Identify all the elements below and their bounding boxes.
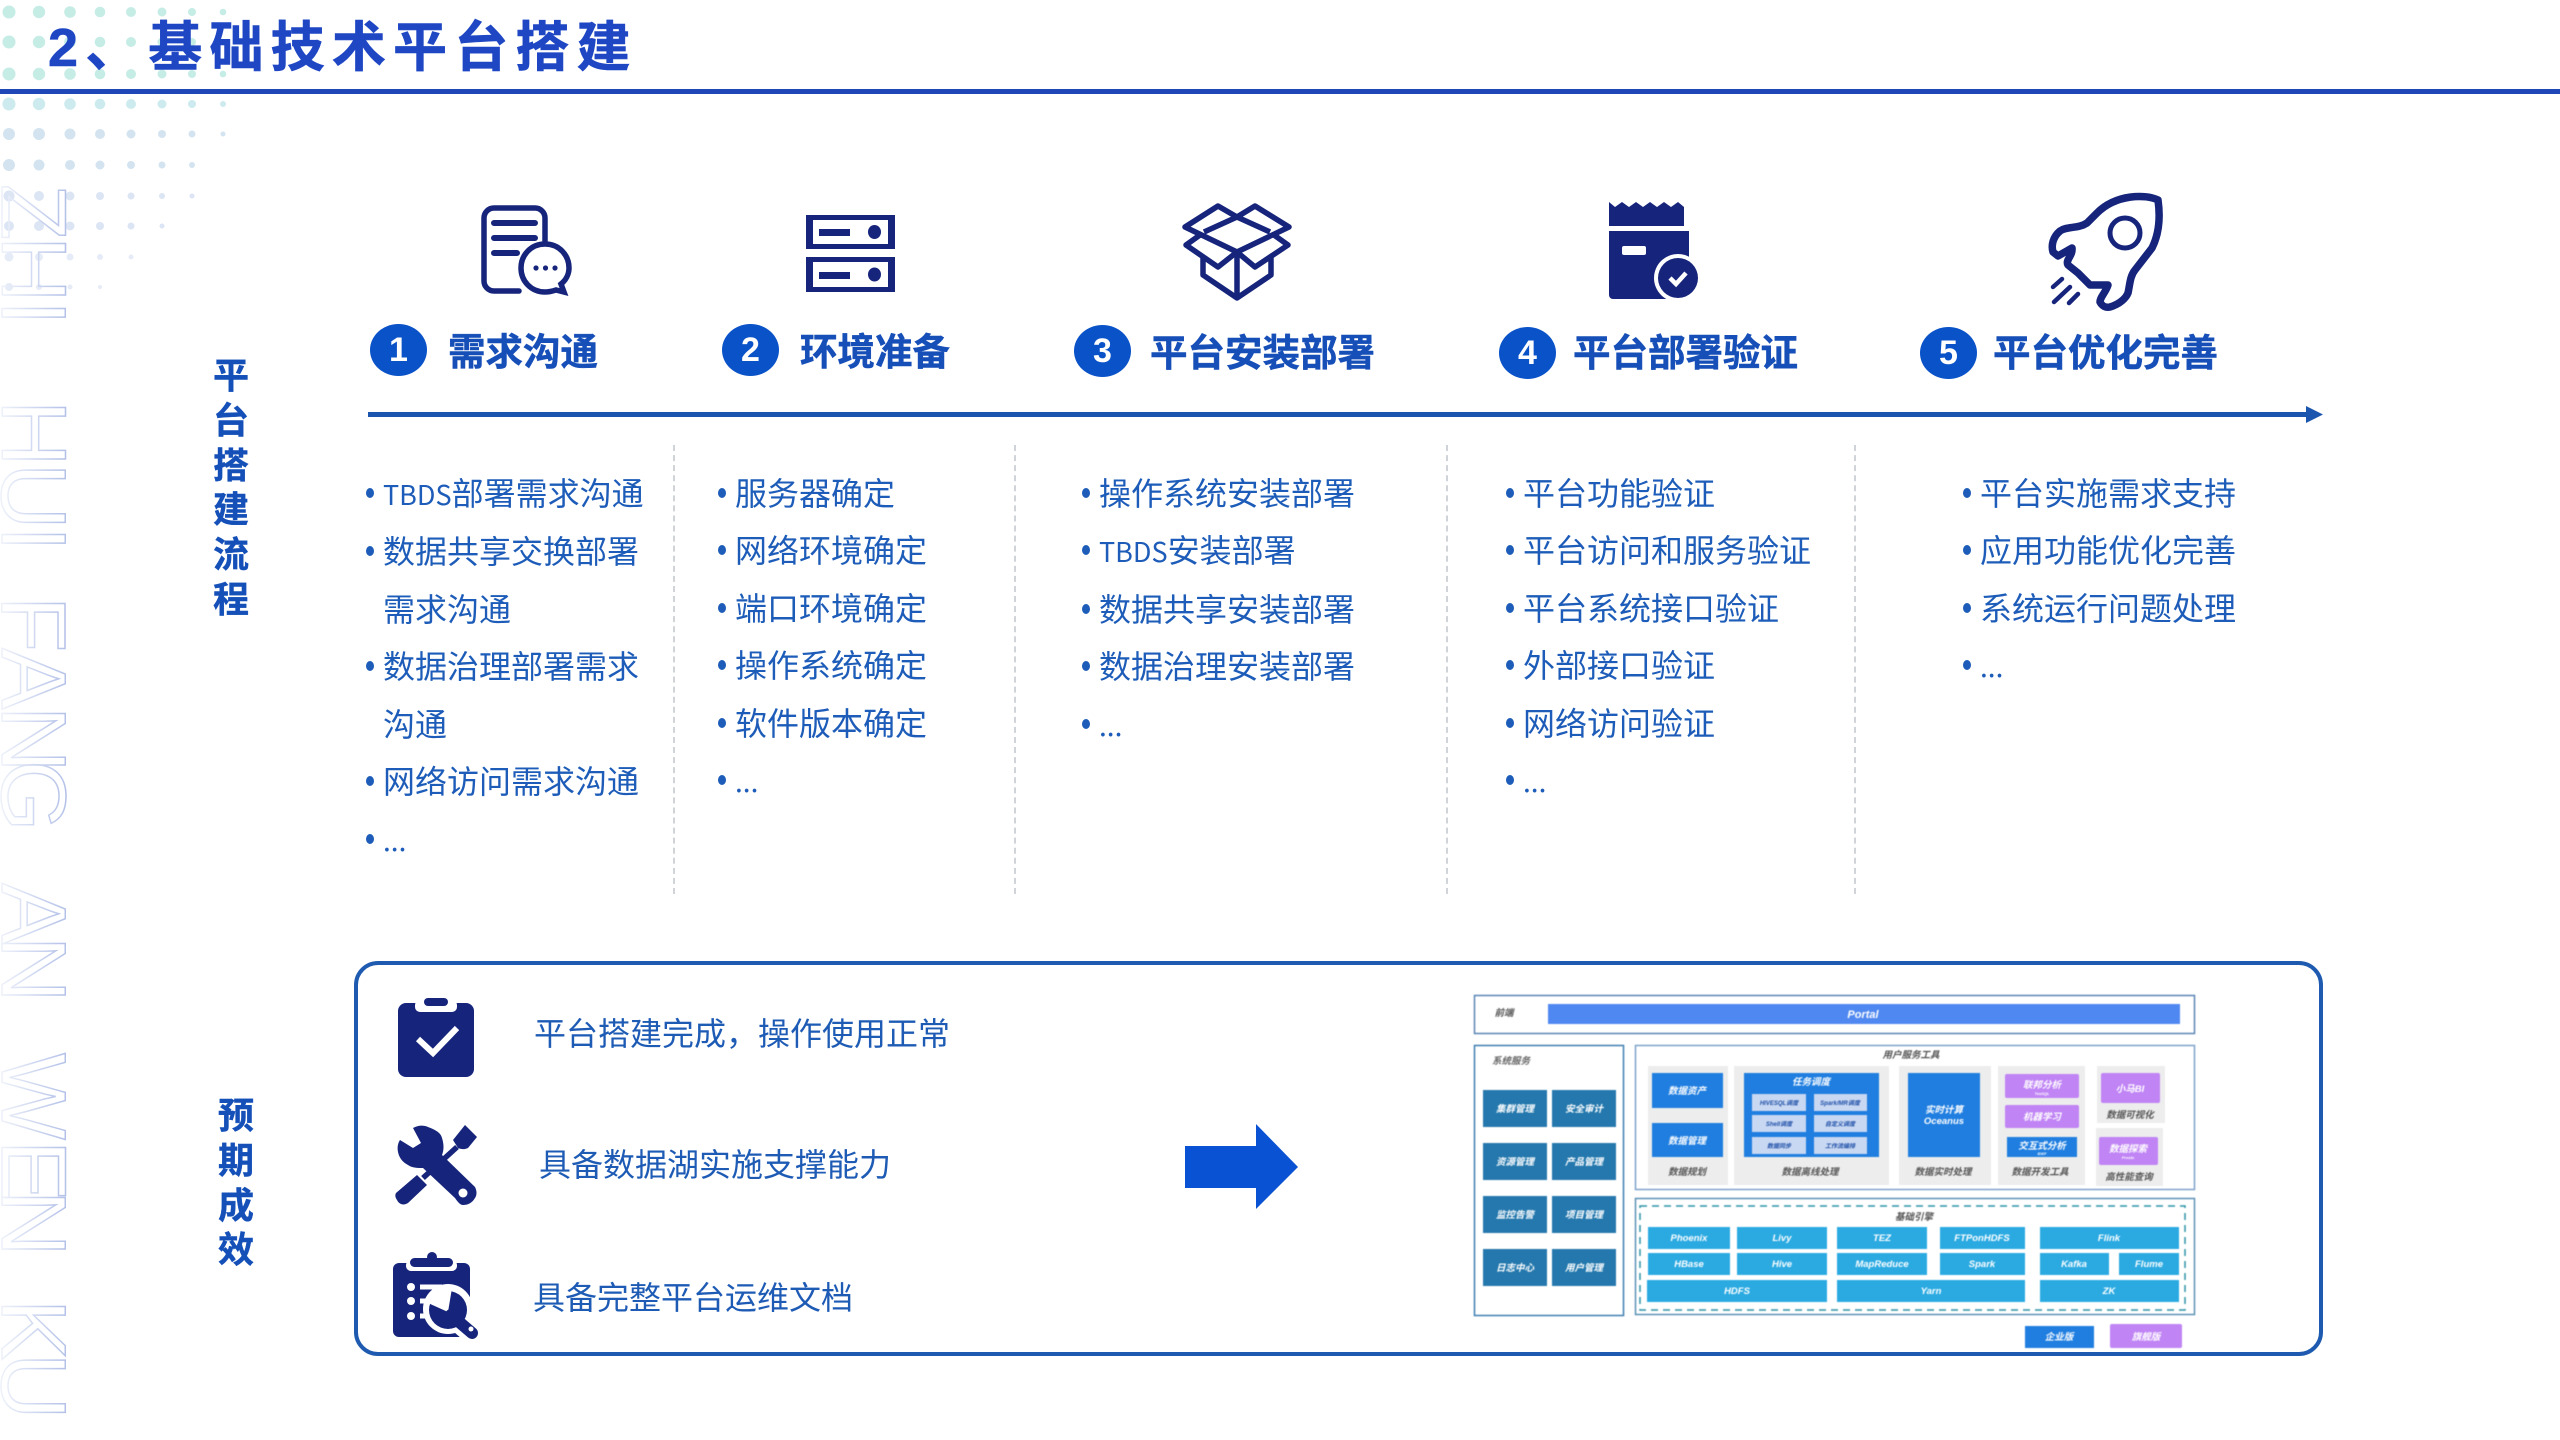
user service tools panel: 数据规划 xyxy=(1668,1166,1707,1178)
system services panel: 项目管理 xyxy=(1565,1209,1604,1221)
list: step 3 tasks xyxy=(1082,468,1355,744)
side label: expected results: 效 xyxy=(218,1229,254,1270)
list: step 5 tasks: 平台实施需求支持 xyxy=(1980,468,2236,514)
base engine panel: TEZ xyxy=(1873,1233,1892,1244)
base engine panel: ZK xyxy=(2102,1286,2116,1297)
base engine panel: Flume xyxy=(2135,1259,2164,1270)
system services panel: 监控告警 xyxy=(1496,1209,1535,1221)
result text 1: 平台搭建完成，操作使用正常 xyxy=(534,1009,950,1055)
list: step 3 tasks: 操作系统安装部署 xyxy=(1099,468,1355,514)
list: step 1 tasks: ... xyxy=(383,820,406,860)
list: step 4 tasks: 平台系统接口验证 xyxy=(1523,584,1779,630)
list: step 1 tasks xyxy=(366,468,644,860)
divider 1 xyxy=(673,445,675,894)
icon: rocket xyxy=(2052,196,2159,307)
icon: open box xyxy=(1185,206,1289,298)
list: step 1 tasks: 数据共享交换部署 xyxy=(383,527,639,573)
list: step 1 tasks: 数据治理部署需求 xyxy=(383,642,639,688)
step 1 number and heading xyxy=(370,320,598,376)
list: step 5 tasks xyxy=(1963,468,2236,686)
legend: flagship edition xyxy=(2110,1324,2182,1348)
result text 2: 具备数据湖实施支撑能力 xyxy=(539,1140,891,1186)
user service tools panel: 数据同步 xyxy=(1767,1142,1792,1150)
system services panel: 安全审计 xyxy=(1565,1103,1604,1115)
user service tools panel: 实时计算 xyxy=(1925,1104,1964,1116)
number badge 5 xyxy=(1920,327,1977,379)
user service tools panel: 数据探索 xyxy=(2109,1143,2148,1155)
list: step 4 tasks: 平台访问和服务验证 xyxy=(1523,526,1811,572)
list: step 5 tasks: 系统运行问题处理 xyxy=(1980,584,2236,630)
step 2 number and heading xyxy=(722,320,950,376)
base engine panel: Hive xyxy=(1772,1259,1793,1270)
system services panel xyxy=(1474,1046,1624,1316)
big arrow xyxy=(1185,1124,1298,1209)
side label: expected results xyxy=(218,1095,254,1270)
step icons xyxy=(481,192,2163,311)
user service tools panel: 联邦分析 xyxy=(2023,1079,2062,1091)
user service tools panel: 任务调度 xyxy=(1792,1076,1831,1088)
list: step 4 tasks: ... xyxy=(1523,761,1546,801)
list: step 2 tasks: ... xyxy=(735,761,758,801)
heading 5: 平台优化完善 xyxy=(1993,322,2218,376)
side label: platform build process: 流 xyxy=(213,534,249,575)
heading 2: 环境准备 xyxy=(800,320,950,376)
number badge 4: 4 xyxy=(1518,334,1537,372)
base engine panel: HBase xyxy=(1674,1259,1704,1270)
base engine panel: Spark xyxy=(1969,1259,1996,1270)
step 3 number and heading xyxy=(1074,322,1375,377)
list: step 2 tasks: 软件版本确定 xyxy=(735,698,927,744)
base engine panel: Yarn xyxy=(1921,1286,1942,1297)
system services panel: 系统服务 xyxy=(1492,1055,1531,1067)
base engine panel: Flink xyxy=(2098,1233,2121,1244)
list: step 5 tasks: ... xyxy=(1980,646,2003,686)
decorative dot grid xyxy=(2,6,226,291)
divider 4 xyxy=(1854,445,1856,894)
heading 4: 平台部署验证 xyxy=(1573,322,1798,376)
divider 3 xyxy=(1446,445,1448,894)
user service tools panel: 数据可视化 xyxy=(2106,1109,2155,1121)
list: step 4 tasks: 外部接口验证 xyxy=(1523,641,1715,687)
vertical outlined watermark text xyxy=(0,184,84,1419)
number badge 1: 1 xyxy=(389,331,408,369)
side label: expected results: 期 xyxy=(218,1140,254,1181)
user service tools panel: Oceanus xyxy=(1924,1116,1964,1127)
list: step 1 tasks: 网络访问需求沟通 xyxy=(383,757,639,803)
list: step 1 tasks: 沟通 xyxy=(383,700,447,746)
front-end row: Portal xyxy=(1847,1009,1880,1021)
number badge 5: 5 xyxy=(1939,334,1958,372)
base engine panel: HDFS xyxy=(1724,1286,1751,1297)
base engine panel: MapReduce xyxy=(1855,1259,1909,1270)
icon: clipboard with wrench xyxy=(393,1252,478,1340)
list: step 2 tasks: 操作系统确定 xyxy=(735,641,927,687)
base engine panel: Livy xyxy=(1772,1233,1792,1244)
result text 3: 具备完整平台运维文档 xyxy=(533,1273,853,1319)
divider 2 xyxy=(1014,445,1016,894)
user service tools panel: 机器学习 xyxy=(2023,1111,2062,1123)
user service tools panel: 数据开发工具 xyxy=(2011,1166,2069,1178)
legend: enterprise edition xyxy=(2025,1326,2094,1348)
icon: server stack xyxy=(806,215,895,292)
base engine panel: Phoenix xyxy=(1671,1233,1708,1244)
title rule xyxy=(0,89,2560,94)
icon: crossed wrench and screwdriver xyxy=(395,1125,477,1205)
front-end row xyxy=(1474,996,2194,1034)
user service tools panel xyxy=(1636,1046,2194,1190)
icon: clipboard check xyxy=(398,998,474,1077)
legend: enterprise edition: 企业版 xyxy=(2045,1331,2075,1343)
side label: platform build process: 程 xyxy=(213,579,249,620)
list: step 3 tasks: 数据共享安装部署 xyxy=(1099,584,1355,630)
user service tools panel: 数据资产 xyxy=(1668,1085,1707,1097)
user service tools panel: Shell调度 xyxy=(1766,1120,1793,1128)
list: step 4 tasks xyxy=(1506,468,1811,801)
list: step 1 tasks: TBDS部署需求沟通 xyxy=(383,468,644,514)
step 4 number and heading xyxy=(1499,322,1798,379)
heading 3: 平台安装部署 xyxy=(1150,322,1375,376)
user service tools panel: HIVESQL调度 xyxy=(1760,1099,1799,1107)
front-end row: 前端 xyxy=(1494,1007,1515,1019)
user service tools panel: Spark/MR调度 xyxy=(1820,1099,1861,1107)
side label: platform build process: 平 xyxy=(213,355,249,396)
user service tools panel: Presto xyxy=(2122,1155,2135,1160)
user service tools panel: 高性能查询 xyxy=(2105,1171,2154,1183)
list: step 4 tasks: 网络访问验证 xyxy=(1523,698,1715,744)
heading 1: 需求沟通 xyxy=(448,320,598,376)
number badge 2: 2 xyxy=(741,331,760,369)
list: step 5 tasks: 应用功能优化完善 xyxy=(1980,526,2236,572)
user service tools panel: 交互式分析 xyxy=(2018,1140,2067,1152)
user service tools panel: 用户服务工具 xyxy=(1882,1049,1940,1061)
side label: expected results: 成 xyxy=(218,1185,254,1226)
number badge 3: 3 xyxy=(1093,332,1112,370)
list: step 1 tasks: 需求沟通 xyxy=(383,584,511,630)
list: step 2 tasks xyxy=(718,468,927,801)
number badge 4 xyxy=(1499,327,1556,379)
icon: calendar check xyxy=(1609,202,1702,302)
user service tools panel: 数据管理 xyxy=(1668,1135,1707,1147)
user service tools panel: 小马BI xyxy=(2116,1084,2145,1095)
side label: expected results: 预 xyxy=(218,1095,254,1136)
user service tools panel: 自定义调度 xyxy=(1825,1120,1856,1128)
number badge 1 xyxy=(370,324,427,376)
list: step 3 tasks: TBDS安装部署 xyxy=(1099,526,1296,572)
side label: platform build process: 台 xyxy=(213,400,249,441)
user service tools panel: IDEF xyxy=(2037,1151,2047,1156)
panel: expected results frame xyxy=(354,961,2323,1356)
user service tools panel: 数据离线处理 xyxy=(1781,1166,1840,1178)
user service tools panel: TeaSQL xyxy=(2035,1091,2050,1096)
list: step 2 tasks: 端口环境确定 xyxy=(735,584,927,630)
system services panel: 日志中心 xyxy=(1496,1262,1534,1274)
system services panel: 用户管理 xyxy=(1565,1262,1604,1274)
number badge 3 xyxy=(1074,325,1131,377)
base engine panel xyxy=(1636,1198,2194,1314)
legend: flagship edition: 旗舰版 xyxy=(2132,1331,2162,1343)
side label: platform build process: 建 xyxy=(213,489,249,530)
side label: platform build process: 搭 xyxy=(213,445,249,486)
number badge 2 xyxy=(722,324,779,376)
system services panel: 资源管理 xyxy=(1496,1156,1535,1168)
list: step 3 tasks: 数据治理安装部署 xyxy=(1099,642,1355,688)
system services panel: 产品管理 xyxy=(1565,1156,1604,1168)
base engine panel: FTPonHDFS xyxy=(1954,1233,2010,1244)
list: step 4 tasks: 平台功能验证 xyxy=(1523,468,1715,514)
icon: document with chat bubble xyxy=(484,208,569,292)
side label: platform build process xyxy=(213,355,249,620)
base engine panel: 基础引擎 xyxy=(1895,1211,1934,1223)
step 5 number and heading xyxy=(1920,322,2218,379)
list: step 3 tasks: ... xyxy=(1099,704,1122,744)
base engine panel: Kafka xyxy=(2061,1259,2087,1270)
list: step 2 tasks: 网络环境确定 xyxy=(735,526,927,572)
user service tools panel: 工作流编排 xyxy=(1825,1142,1856,1150)
list: step 2 tasks: 服务器确定 xyxy=(735,468,895,514)
title: 2、基础技术平台搭建 xyxy=(48,18,638,78)
user service tools panel: 数据实时处理 xyxy=(1914,1166,1973,1178)
timeline arrow xyxy=(368,406,2323,423)
system services panel: 集群管理 xyxy=(1496,1103,1535,1115)
